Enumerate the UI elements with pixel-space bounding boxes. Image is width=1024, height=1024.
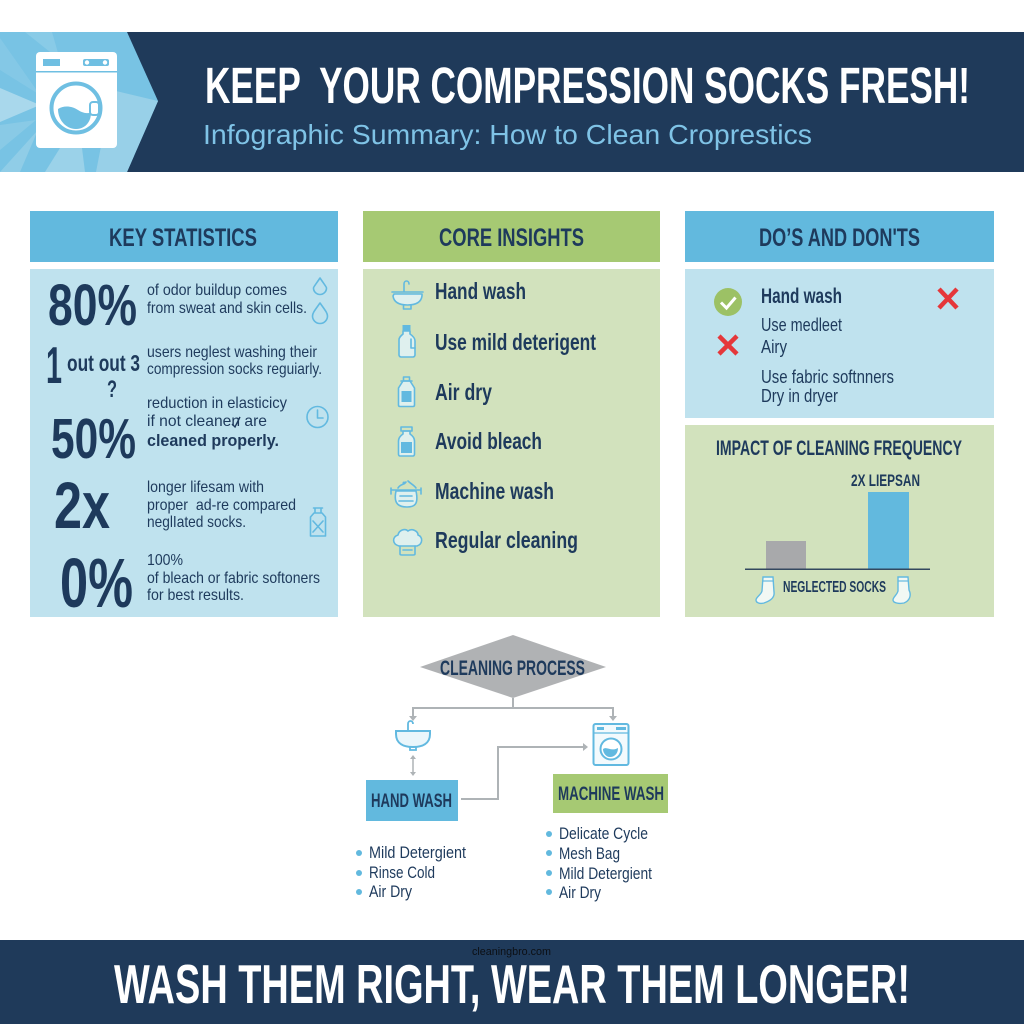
stat: 50%: 50%	[51, 407, 136, 471]
stat: 80%: 80%	[48, 273, 137, 338]
stat: 0%: 0%	[60, 544, 133, 622]
footer banner	[0, 940, 1024, 1024]
heading: do's and don'ts: DO’S AND DON'TS	[759, 224, 920, 252]
stat: 0%: 100%	[147, 552, 183, 569]
icon: red cross right	[939, 289, 957, 308]
stat: 50%: cleaned properly.	[147, 431, 279, 450]
stat: 2x: proper ad-re compared	[147, 497, 296, 514]
bar chart: NEGLECTED SOCKS	[783, 579, 886, 596]
flowchart: cleaning process	[356, 635, 668, 902]
insight: air dry: Air dry	[435, 379, 492, 405]
stat: 80%	[48, 273, 307, 338]
insight: avoid bleach: Avoid bleach	[435, 428, 542, 454]
list: machine wash steps: Air Dry	[559, 883, 601, 902]
do's and don'ts list: Dry in dryer	[761, 386, 838, 406]
arrow: sink to hand wash	[410, 755, 416, 776]
stat: 1 out of 3: ?	[107, 376, 117, 403]
panel: key statistics	[30, 211, 338, 622]
header banner	[0, 32, 1024, 172]
insight: regular cleaning	[394, 527, 578, 555]
insight: machine wash	[391, 478, 554, 507]
stat: 0%: of bleach or fabric softoners	[147, 570, 320, 587]
insight: hand wash	[392, 278, 526, 309]
header chevron with rays	[0, 32, 158, 172]
stat: 80%: of odor buildup comes	[147, 282, 287, 299]
stat: 50%	[51, 395, 287, 471]
heading: key statistics: KEY STATISTICS	[109, 224, 257, 252]
icon: sink	[396, 721, 430, 750]
panel: impact of cleaning frequency	[685, 425, 994, 617]
heading: do's and don'ts	[685, 211, 994, 262]
stat: 0%	[60, 544, 320, 622]
decision diamond	[420, 635, 606, 698]
insight: avoid bleach	[398, 427, 542, 456]
decision diamond: CLEANING PROCESS	[440, 657, 585, 680]
bar chart: 2X LIEPSAN	[851, 471, 920, 490]
heading: core insights: CORE INSIGHTS	[439, 224, 584, 252]
stat: 1 out of 3: out out 3	[67, 350, 140, 376]
arrows from diamond	[409, 698, 617, 721]
icon: crossed-out bottle	[310, 508, 326, 536]
list: hand wash steps: Rinse Cold	[369, 863, 435, 882]
list: machine wash steps: Mesh Bag	[559, 844, 620, 863]
arrow: hand wash to machine wash	[461, 743, 588, 799]
do's and don'ts list: Hand wash	[761, 285, 842, 308]
list: hand wash steps: Air Dry	[369, 882, 412, 901]
insight: hand wash: Hand wash	[435, 278, 526, 304]
stat: 1 out of 3: 1	[46, 337, 62, 395]
heading: key statistics	[30, 211, 338, 262]
subtitle: Infographic Summary: How to Clean Croprestics	[203, 119, 812, 150]
stat: 0%: for best results.	[147, 587, 244, 604]
icon: red cross left	[719, 336, 737, 354]
stat: 2x: neglIated socks.	[147, 514, 246, 531]
insight: use mild detergent: Use mild deterigent	[435, 329, 596, 355]
watermark: cleaningbro.com	[472, 946, 551, 958]
list: hand wash steps	[356, 843, 466, 901]
icon: washing machine	[36, 52, 117, 148]
stat: 80%: from sweat and skin cells.	[147, 300, 307, 317]
icon: left sock	[756, 577, 774, 603]
insight: machine wash: Machine wash	[435, 478, 554, 504]
stat: 1 out of 3: users neglest washing their	[147, 344, 318, 361]
box: machine wash	[553, 774, 668, 813]
stat: 1 out of 3	[46, 337, 322, 403]
do's and don'ts list	[761, 285, 894, 406]
heading: core insights	[363, 211, 660, 262]
stat: 2x	[54, 468, 296, 542]
insight: use mild detergent	[399, 325, 596, 357]
stat: 50%: reduction in elasticicy	[147, 395, 287, 412]
box: hand wash: HAND WASH	[371, 791, 452, 812]
do's and don'ts list: Use fabric softnners	[761, 367, 894, 387]
panel: core insights	[363, 211, 660, 617]
stat: 2x: longer lifesam with	[147, 479, 264, 496]
stat: 1 out of 3: compression socks reguiarly.	[147, 361, 322, 378]
box: machine wash: MACHINE WASH	[558, 784, 664, 805]
panel: do's and don'ts	[685, 211, 994, 418]
stat: 50%: if not cleanen are	[147, 413, 267, 430]
icon: right sock	[893, 577, 910, 603]
icon: clock	[307, 406, 328, 428]
list: machine wash steps: Delicate Cycle	[559, 824, 648, 843]
box: hand wash	[366, 780, 458, 821]
list: machine wash steps	[546, 824, 652, 902]
icon: water drops	[312, 278, 328, 324]
list: machine wash steps: Mild Detergient	[559, 864, 652, 883]
stat: 2x: 2x	[54, 468, 110, 542]
icon: green check	[714, 288, 742, 316]
insight: air dry	[398, 377, 492, 406]
do's and don'ts list: Airy	[761, 337, 787, 357]
do's and don'ts list: Use medleet	[761, 315, 842, 335]
icon: washing machine small	[594, 724, 628, 765]
insight: regular cleaning: Regular cleaning	[435, 527, 578, 553]
list: hand wash steps: Mild Detergient	[369, 843, 466, 862]
bar chart	[745, 471, 930, 596]
